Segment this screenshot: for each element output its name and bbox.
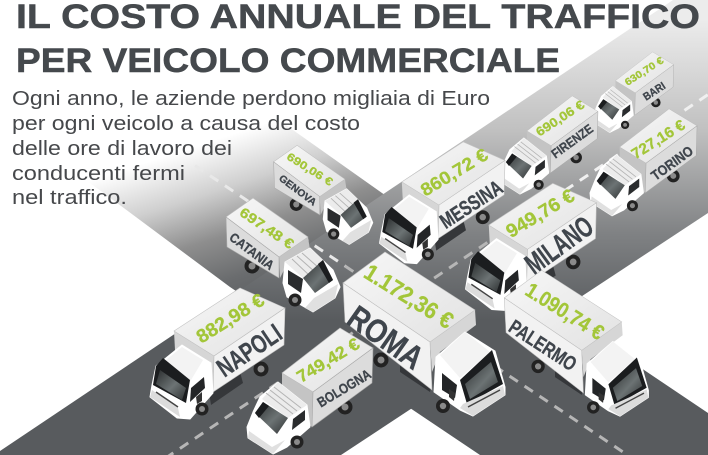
lane dashes: upper-right road section [520,95,708,221]
truck: Messina [380,142,507,264]
truck: Catania: 697,48 € [237,204,297,252]
truck: Bologna: BOLOGNA [314,366,374,410]
title [16,0,700,80]
truck: Genova: 690,06 € [284,151,335,189]
intro text: conducenti fermi [12,163,185,185]
truck: Milano [466,183,600,310]
truck: Napoli [150,288,287,419]
truck: Palermo: 1.090,74 € [521,279,608,345]
truck: Bologna: 749,42 € [293,334,364,387]
truck: Palermo: PALERMO [504,316,580,376]
truck: Torino: 727,16 € [629,116,689,163]
truck: Milano: MILANO [519,211,600,281]
truck: Napoli: 882,98 € [193,290,269,348]
truck: Catania: CATANIA [227,230,278,273]
truck: Bologna [247,328,374,454]
truck: Torino [590,109,697,216]
truck: Catania [226,198,340,312]
intro text [12,88,490,209]
lane dashes: upper-left road, faded section [195,166,345,266]
intro text: Ogni anno, le aziende perdono migliaia di Euro [12,88,490,110]
title: PER VEICOLO COMMERCIALE [16,42,560,80]
truck: Bari: BARI [641,80,668,103]
truck: Genova [274,145,373,244]
truck: Firenze: FIRENZE [548,121,596,161]
truck: Torino: TORINO [648,142,696,184]
truck: Bari [593,52,674,133]
truck: Bari: 630,70 € [623,55,666,89]
truck: Messina: MESSINA [436,176,507,234]
intro text: nel traffico. [12,187,127,209]
lane dashes: lower-right road section [345,266,632,455]
truck: Milano: 949,76 € [503,185,579,243]
truck: Firenze: 690,06 € [533,98,587,139]
truck: Roma: 1.172,36 € [360,259,458,334]
truck: Palermo [504,270,648,416]
intro text: per ogni veicolo a causa del costo [12,113,360,135]
lane dashes: lower-left road section [165,221,520,455]
truck: Firenze [500,96,598,194]
truck: Genova: GENOVA [276,173,318,209]
truck: Napoli: NAPOLI [211,318,287,383]
truck: Roma [341,252,505,416]
truck: Messina: 860,72 € [417,145,492,200]
truck: Roma: ROMA [341,298,431,376]
intro text: delle ore di lavoro dei [12,138,232,160]
